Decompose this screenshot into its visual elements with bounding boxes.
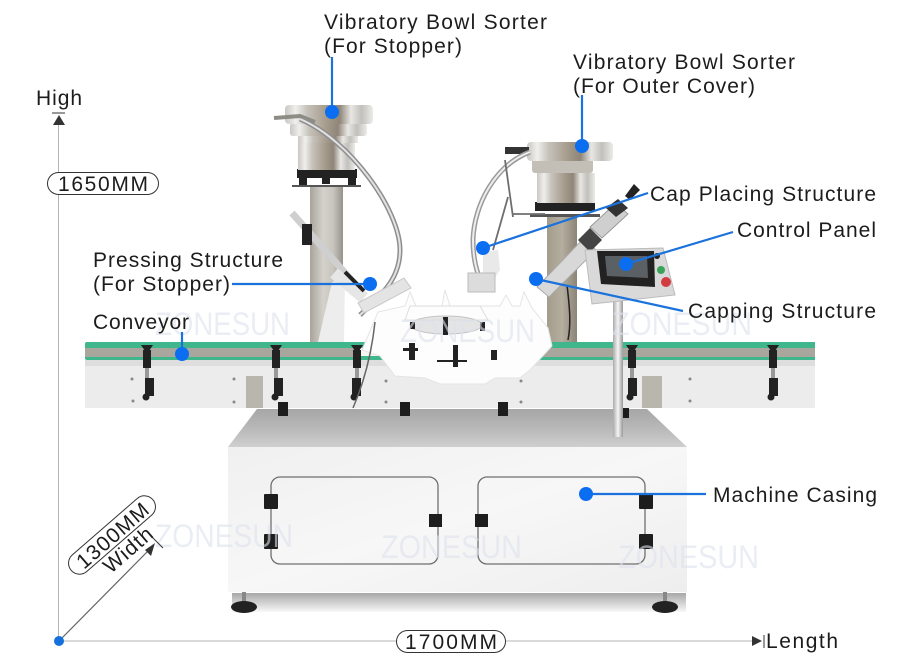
label: pressing structure: Pressing Structure — [93, 249, 283, 272]
callout: cap placing — [476, 193, 648, 255]
dimension: 1300MM: 1300MM — [72, 499, 154, 574]
watermarks: ZONESUN — [618, 539, 759, 575]
hinges and handles — [264, 402, 653, 549]
rotary star wheel — [362, 290, 552, 384]
label: vibratory bowl sorter for stopper: (For Stopper) — [324, 35, 462, 58]
callout: control panel — [619, 232, 733, 271]
axis: width — [59, 537, 163, 641]
right vibratory bowl and column — [468, 142, 613, 342]
pressing structure — [292, 213, 411, 342]
callout: conveyor — [175, 332, 189, 361]
left door — [271, 477, 438, 564]
watermarks: ZONESUN — [612, 306, 752, 342]
label: control panel: Control Panel — [737, 219, 876, 242]
capping structure — [537, 184, 640, 340]
conveyor — [85, 342, 815, 408]
label: vibratory bowl sorter for outer cover: Vibratory Bowl Sorter — [573, 51, 795, 74]
watermarks — [155, 306, 759, 575]
feet — [231, 592, 678, 613]
watermarks: ZONESUN — [155, 306, 290, 342]
callout: pressing — [232, 277, 377, 291]
label: length: Length — [766, 630, 838, 653]
conveyor brackets — [141, 345, 779, 400]
label: vibratory bowl sorter for outer cover: (For Outer Cover) — [573, 75, 755, 98]
label: pressing structure — [93, 249, 283, 296]
label: conveyor: Conveyor — [93, 311, 189, 334]
watermarks: ZONESUN — [400, 313, 535, 349]
axis origin dot — [54, 636, 64, 646]
watermarks: ZONESUN — [155, 518, 293, 554]
label: high: High — [36, 87, 82, 110]
axis: length — [59, 635, 764, 648]
label: vibratory bowl sorter for outer cover — [573, 51, 795, 98]
label: machine casing: Machine Casing — [713, 484, 877, 507]
label: vibratory bowl sorter for stopper: Vibratory Bowl Sorter — [324, 11, 547, 34]
callout lines and dots — [175, 57, 733, 501]
label: width: Width — [99, 523, 158, 578]
left vibratory bowl and column — [274, 105, 400, 342]
callout: outer cover sorter — [575, 95, 589, 153]
dispensing rod — [353, 322, 375, 408]
callout: capping — [529, 272, 683, 311]
watermarks: ZONESUN — [381, 529, 522, 565]
axis: height — [52, 113, 65, 641]
label: vibratory bowl sorter for stopper — [324, 11, 547, 58]
label: cap placing structure: Cap Placing Structure — [650, 183, 876, 206]
label: pressing structure: (For Stopper) — [93, 273, 230, 296]
dimension: 1700MM: 1700MM — [405, 631, 497, 654]
right door — [478, 477, 645, 564]
callout: casing — [579, 487, 706, 501]
dimension: 1650MM: 1650MM — [58, 173, 148, 196]
callout: stopper sorter — [325, 57, 339, 119]
machine casing — [228, 402, 687, 613]
control panel — [585, 248, 675, 437]
label: capping structure: Capping Structure — [688, 300, 876, 323]
